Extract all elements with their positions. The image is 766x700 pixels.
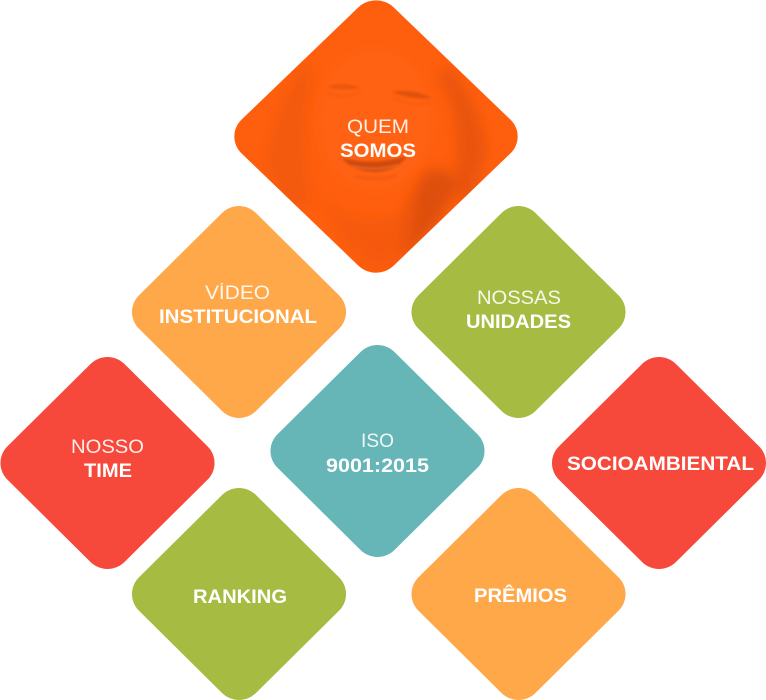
panel: nosso time: TIME [84,460,132,482]
panel: vídeo institucional: INSTITUCIONAL [159,306,317,328]
panel: nossas unidades: NOSSAS [477,288,561,309]
panel: nosso time [0,347,224,579]
panel: nossas unidades: UNIDADES [466,311,571,333]
panel: socioambiental [542,347,766,579]
panel: iso 9001:2015: ISO [361,431,394,452]
panel: nossas unidades [402,196,635,428]
panel: quem somos [224,0,528,283]
label: quem somos [340,117,416,162]
panel: nosso time: NOSSO [71,437,144,458]
panel: ranking [122,478,356,700]
panel: socioambiental: SOCIOAMBIENTAL [567,453,754,475]
panel: prêmios [402,478,635,700]
panel: ranking: RANKING [193,586,287,608]
label: quem somos: QUEM [347,117,409,138]
label: quem somos: SOMOS [340,140,416,162]
panel: iso 9001:2015 [261,335,494,567]
panel: iso 9001:2015: 9001:2015 [326,455,429,477]
panel: prêmios: PRÊMIOS [474,583,567,607]
photo: smiling woman tinted orange [270,70,488,273]
panel: vídeo institucional [122,196,356,428]
panel: vídeo institucional: VÍDEO [205,283,270,304]
